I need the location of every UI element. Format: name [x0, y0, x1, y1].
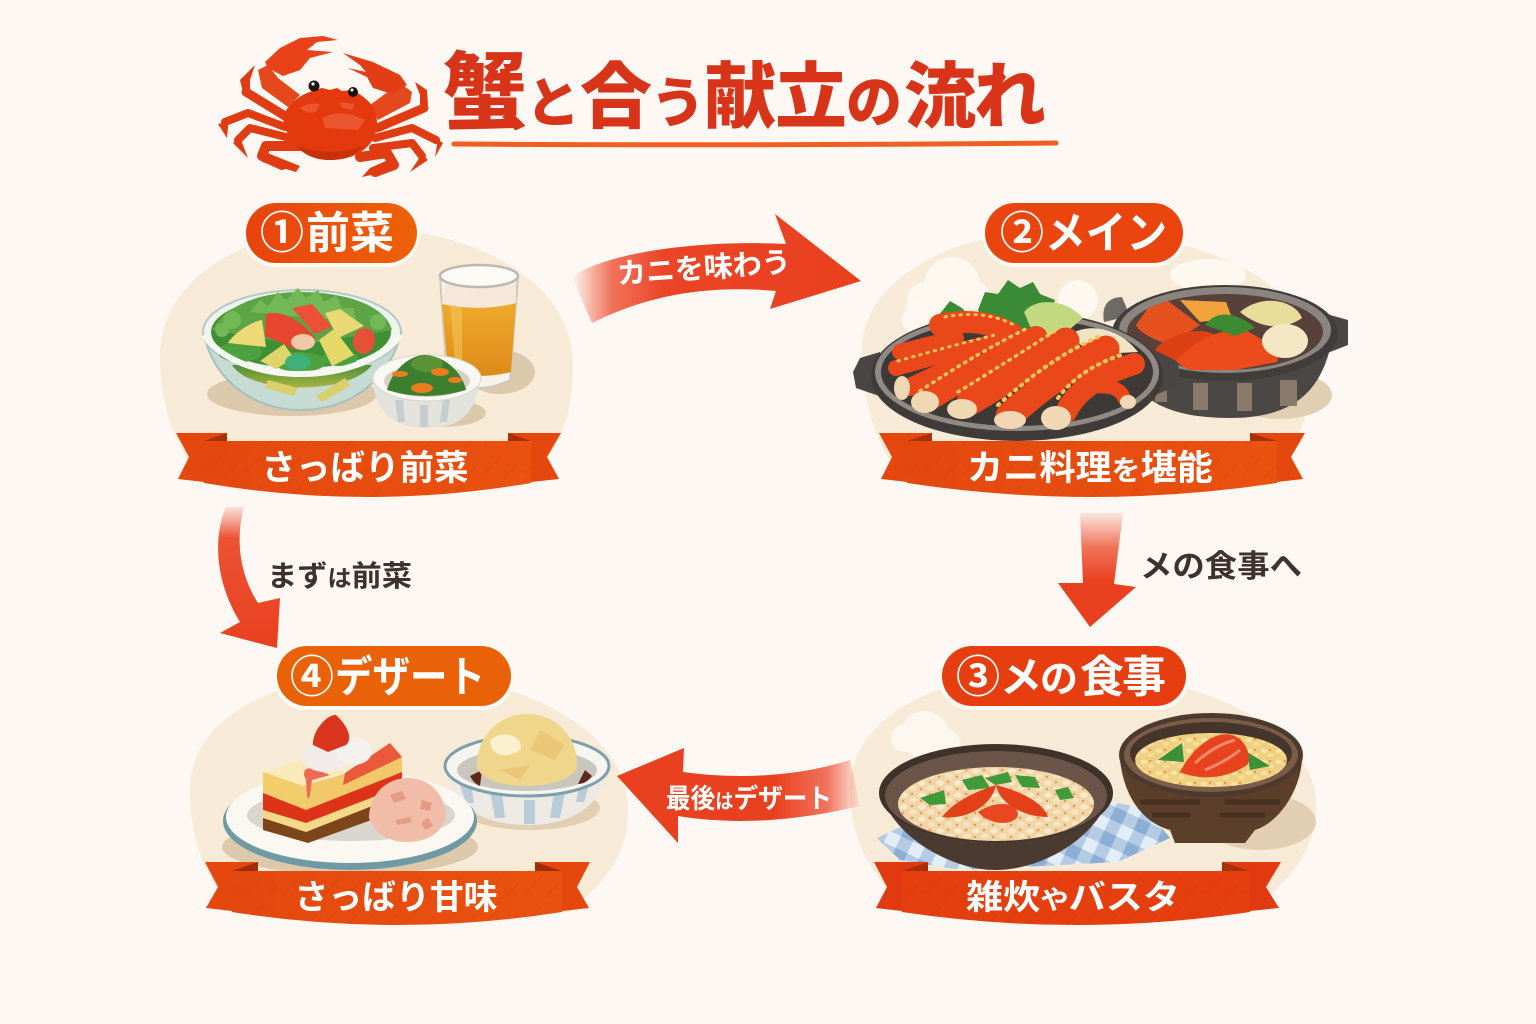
crab shell	[283, 88, 377, 160]
arrow label: appetizer first: まずは前菜	[267, 560, 412, 593]
illustration: ice cream bowl	[445, 714, 610, 830]
illustration: checked cloth	[877, 800, 1170, 870]
illustration: large rice bowl	[879, 744, 1113, 870]
step badge 4: デザート	[335, 653, 485, 702]
title: 立	[775, 58, 847, 138]
ribbon: main dish	[879, 433, 1305, 497]
ribbon label: カニ料理を堪能	[967, 449, 1213, 488]
step badge 3: ③	[956, 653, 1000, 702]
illustration: pink ice cream scoop	[369, 778, 446, 842]
title: 献	[704, 58, 776, 138]
panel: finishing meal	[850, 645, 1316, 925]
illustration: steam	[891, 711, 961, 761]
arrow: finishing meal to dessert	[617, 748, 860, 843]
illustration: clay pot	[1103, 285, 1348, 419]
illustration: small rice bowl	[1119, 713, 1316, 850]
step badge 4	[274, 645, 514, 710]
step badge 2: ②	[1000, 209, 1044, 258]
ribbon: finishing meal	[874, 862, 1281, 925]
greens and cabbage	[978, 280, 1055, 338]
panel: appetizer	[160, 201, 573, 497]
title: 流	[904, 58, 976, 138]
title: う	[651, 74, 705, 134]
panel background	[190, 674, 628, 912]
ribbon label: さっばり甘味	[294, 879, 498, 917]
step badge 1	[243, 201, 420, 267]
crab legs	[896, 314, 1134, 416]
crab shell highlight	[300, 102, 365, 130]
title: 合	[580, 58, 652, 138]
crab claw: left	[265, 36, 338, 76]
step badge 3	[939, 645, 1189, 710]
crab eyes	[308, 80, 358, 97]
arrow: finishing meal to dessert: 最後はデザート	[666, 783, 832, 814]
arrow: to dessert	[218, 507, 280, 648]
crab shell shading	[297, 146, 363, 160]
crab arm: right	[370, 83, 412, 120]
title: 蟹	[443, 46, 527, 140]
arrow: main to finishing meal	[1058, 513, 1136, 627]
illustration: side dish	[372, 355, 486, 428]
step badge 3: メ	[1000, 654, 1042, 701]
step badge 3: 食	[1080, 653, 1124, 702]
panel background	[862, 231, 1311, 482]
ribbon label: 雑炊やバスタ	[966, 879, 1180, 917]
title: の	[846, 71, 902, 134]
icon: red crab	[218, 36, 443, 177]
crab claw: right	[343, 53, 407, 94]
panel: dessert	[190, 645, 628, 925]
illustration: grill pan	[853, 280, 1180, 441]
arrow: appetizer to main	[572, 214, 861, 323]
title: と	[526, 74, 580, 134]
ribbon: dessert	[205, 862, 590, 925]
step badge 3: の	[1040, 659, 1078, 701]
step badge 1: 前菜	[306, 209, 394, 258]
illustration: steam behind the pan	[902, 257, 1246, 333]
step badge 2: メイン	[1045, 209, 1167, 258]
crab arm: left	[258, 65, 300, 107]
illustration: strawberry cake	[263, 715, 402, 843]
arrow label: to finishing meal: メの食事へ	[1140, 549, 1302, 584]
illustration: dessert plate	[222, 771, 478, 875]
ribbon: appetizer	[176, 433, 561, 497]
title underline	[454, 143, 1056, 145]
arrow: appetizer to main: カニを味わう	[616, 246, 792, 291]
illustration: glass of beer	[440, 265, 535, 394]
step badge 1: ①	[260, 209, 304, 258]
title: れ	[974, 58, 1046, 138]
step badge 2	[982, 201, 1186, 267]
illustration: salad bowl	[203, 288, 401, 416]
panel background	[160, 227, 573, 482]
panel background	[850, 671, 1316, 912]
step badge 4: ④	[290, 653, 334, 702]
step badge 3: 事	[1122, 653, 1166, 702]
ribbon label: さっばり前菜	[262, 449, 468, 488]
panel: main dish	[853, 201, 1348, 497]
